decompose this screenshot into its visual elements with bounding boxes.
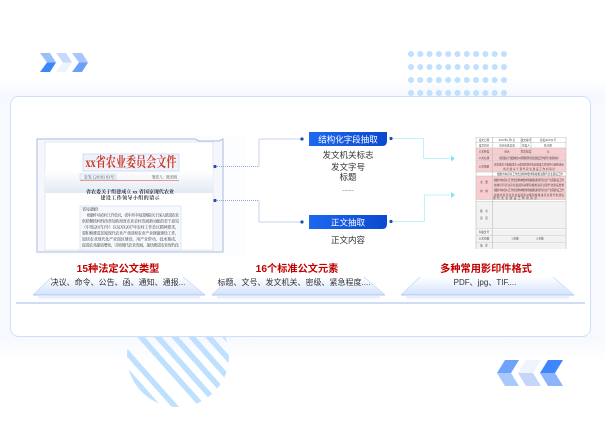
document number: 农发 [2018] 83号 (84, 174, 114, 180)
document body text: 要积极推进国家现代农业产业园和农业产业强镇建设工作， (82, 230, 179, 236)
main panel (10, 96, 590, 336)
document title: 建设工作领导小组的请示 (100, 194, 160, 202)
document body text: 供给侧结构性改革加快培育农业农村发展新动能的若干意见 (82, 218, 179, 224)
caption 2: document elements: 标题、文号、发文机关、密级、紧急程度.... (218, 277, 370, 287)
arrowheads (451, 156, 455, 198)
document page (45, 142, 213, 250)
document title (86, 188, 174, 202)
red heading box (83, 154, 179, 171)
caption 1: document types: 决议、命令、公告、函、通知、通报... (51, 277, 185, 287)
connector dots left (213, 137, 393, 224)
table text: 根据中央农村工作会议精神要求积极推进现代农业产业园建设工作 (494, 188, 564, 192)
table text: 陈光明 (544, 144, 552, 148)
table text: 省农业委员会 (499, 144, 515, 148)
document title: 省农委关于组建成立 xx 省国家现代农业 (86, 188, 174, 196)
pill: structured field extraction (309, 132, 387, 146)
caption 1: document types (33, 262, 205, 298)
structured field list: 标题 (339, 172, 357, 182)
decoration: top-left chevrons (40, 53, 88, 72)
pink rows (476, 148, 566, 200)
decoration: striped circle (127, 337, 229, 407)
document body text: 促进农业提质增效，引领现代农业发展，加快推进农业现代化 (82, 242, 179, 248)
body extraction text: 正文内容 (331, 235, 365, 245)
table text: 主 要 (480, 180, 488, 184)
caption 2: document elements (212, 262, 385, 298)
document body text (80, 206, 181, 250)
decoration: bottom-right chevrons (497, 360, 563, 386)
table text: 0 份数 (536, 236, 544, 240)
table text: 无 (547, 150, 550, 154)
document frame (37, 139, 223, 252)
table text: 发文编号 (521, 138, 532, 142)
baseline rule (16, 302, 585, 304)
caption 1: document types: 15种法定公文类型 (77, 262, 159, 275)
structured field list: 发文字号 (331, 162, 365, 172)
table text: 公文标题 (479, 156, 490, 160)
table text: 加快培育农业农村发展新动能积极推进农业现代化建设 (494, 193, 564, 197)
table text: 现代农业建设工作的请示 (493, 196, 537, 200)
connectors: extraction to form (393, 138, 450, 222)
structured field list: 发文机关标志 (322, 150, 374, 160)
decoration: dot grid (408, 51, 507, 96)
structured field list (322, 150, 374, 193)
document body text: 根据中央农村工作会议、省中共中央国务院关于深入推进农业 (87, 212, 179, 218)
table text: 意 见 (480, 216, 488, 220)
table text: 2017年1月1日 (499, 138, 516, 142)
table text: 加快培育农业农村发展新动能积极推进农业现代化建设要求 (494, 183, 564, 187)
background glow around panel (0, 78, 605, 360)
table text: 公文份数 (479, 236, 490, 240)
table text: 省农委关于现代农业建设工作的请示 (503, 167, 555, 171)
table text: 省农委关于组建成立xx省国家现代农业建设工作领导小组的请示 (494, 162, 564, 166)
table text: 省农委关于组建成立xx省国家现代农业建设工作领导小组的请示 (499, 156, 559, 160)
table text: 发文日期 (479, 138, 490, 142)
caption 3: print formats: PDF、jpg、TIF.... (454, 278, 516, 287)
table text: 公文摘要 (479, 164, 490, 168)
caption 3: print formats (401, 262, 574, 298)
table text (479, 138, 564, 248)
table grid (476, 137, 566, 249)
grey rows (476, 202, 566, 249)
table text: 签发人 (522, 144, 530, 148)
table text: 发文机关 (479, 144, 490, 148)
structured field list: ...... (342, 186, 354, 193)
document body text: （中发[2017]1号）以及XX2017年农村工作会议精神要求， (82, 224, 179, 230)
panel: form table (476, 137, 566, 249)
table text: 根据中央农村工作会议精神要求积极推进现代农业产业园建设工作 (494, 178, 564, 182)
caption 3: print formats: 多种常用影印件格式 (440, 262, 532, 275)
table text: 备 注 (480, 244, 488, 248)
document body text: 加快农业现代化产业园区建设，用产业带动，技术集成， (82, 236, 179, 242)
table text: 公文种类 (479, 150, 490, 154)
red heading box: xx省农业委员会文件 (86, 154, 176, 171)
table text: 1 份数 (511, 236, 519, 240)
document body text: 省人民政府： (82, 206, 101, 212)
table text: 批 示 (480, 209, 488, 213)
table text: 请示 (504, 150, 510, 154)
table text: 内 容 (480, 189, 488, 193)
pill: structured field extraction: 结构化字段抽取 (318, 134, 378, 144)
connectors: document to extraction (215, 139, 302, 222)
table text: 农发[2017]1号 (540, 138, 557, 142)
shaded band (45, 170, 213, 193)
caption 2: document elements: 16个标准公文元素 (256, 262, 338, 275)
pill: body extraction (309, 215, 387, 229)
table text: 紧急程度 (521, 150, 532, 154)
document number (80, 174, 179, 180)
table text: 根据中央农村工作会议精神要求积极推进现代农业建设工作 (497, 172, 563, 176)
pill: body extraction: 正文抽取 (331, 217, 365, 227)
document number: 签发人：陈光明 (152, 174, 177, 180)
panel: source document (36, 135, 246, 255)
table text: 印发文号 (479, 230, 490, 234)
